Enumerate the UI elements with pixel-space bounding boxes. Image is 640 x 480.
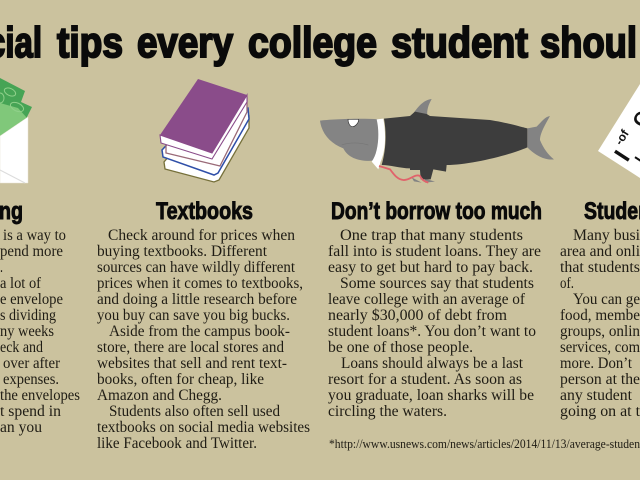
text block: budgeting body: . bbox=[0, 259, 3, 276]
text block: textbooks body: you buy can save you big bucks. bbox=[97, 307, 290, 324]
icon: discount card bbox=[598, 84, 640, 178]
title: student bbox=[391, 19, 528, 67]
text block: textbooks body: Students also often sell used bbox=[109, 403, 280, 420]
text block: discounts body: that students bbox=[560, 259, 640, 276]
text block: budgeting body: e envelope bbox=[0, 291, 63, 308]
text block: textbooks body: Amazon and Chegg. bbox=[97, 387, 222, 404]
text block: borrowing body: One trap that many students bbox=[340, 227, 523, 244]
title: every bbox=[137, 19, 233, 67]
text block: textbooks body: Check around for prices when bbox=[108, 227, 295, 244]
text block: textbooks body: like Facebook and Twitter. bbox=[97, 435, 257, 452]
text block: borrowing body: be one of those people. bbox=[328, 339, 473, 356]
text block: textbooks body: textbooks on social media websites bbox=[97, 419, 310, 436]
title: college bbox=[248, 19, 377, 67]
icon: shark in a suit bbox=[320, 99, 554, 183]
text block: textbooks body: buying textbooks. Different bbox=[97, 243, 268, 260]
text block: discounts body: You can ge bbox=[573, 291, 640, 308]
text block: discounts body bbox=[560, 227, 640, 420]
text block: discounts body: going on at t bbox=[560, 403, 640, 420]
icon: envelope with money bbox=[0, 78, 32, 183]
text block: borrowing body: Loans should always be a last bbox=[341, 355, 524, 372]
text block: borrowing body: Some sources say that students bbox=[340, 275, 534, 292]
text block: borrowing body: leave college with an average of bbox=[328, 291, 526, 308]
text block: budgeting body: the envelopes bbox=[0, 387, 80, 404]
panel: budgeting bbox=[0, 198, 80, 436]
text block: discounts body: any student bbox=[560, 387, 633, 404]
text block: textbooks body bbox=[97, 227, 310, 452]
text block: textbooks body: books, often for cheap, like bbox=[97, 371, 264, 388]
text block: discounts body: area and onli bbox=[560, 243, 640, 260]
title: tips bbox=[57, 19, 123, 67]
text block: discounts body: more. Don’t bbox=[560, 355, 633, 372]
text block: budgeting body: an you bbox=[0, 419, 42, 436]
text block: borrowing body: resort for a student. As soon as bbox=[328, 371, 522, 388]
panel: student discounts bbox=[560, 198, 640, 420]
text block: budgeting body: over after bbox=[3, 355, 61, 372]
text block: borrowing body: you graduate, loan sharks will be bbox=[328, 387, 534, 404]
text block: borrowing body: circling the waters. bbox=[328, 403, 447, 420]
heading: textbooks: Textbooks bbox=[156, 198, 253, 225]
icon: stack of books bbox=[160, 79, 249, 182]
text block: budgeting body: expenses. bbox=[3, 371, 59, 388]
text block: textbooks body: store, there are local stores and bbox=[97, 339, 284, 356]
heading: don't borrow too much: Don’t borrow too much bbox=[331, 198, 542, 225]
text block: budgeting body: eck and bbox=[0, 339, 43, 356]
text block: budgeting body bbox=[0, 227, 80, 436]
text block: budgeting body: a lot of bbox=[0, 275, 42, 292]
text block: textbooks body: sources can have wildly different bbox=[97, 259, 296, 276]
text block: budgeting body: pend more bbox=[0, 243, 63, 260]
text block: budgeting body: t spend in bbox=[0, 403, 61, 420]
panel: don't borrow too much bbox=[328, 198, 640, 451]
text block: borrowing body: nearly $30,000 of debt from bbox=[328, 307, 507, 324]
text block: discounts body: Many busi bbox=[573, 227, 640, 244]
title bbox=[0, 19, 637, 67]
panel: textbooks bbox=[97, 198, 310, 452]
text block: textbooks body: websites that sell and rent text- bbox=[97, 355, 287, 372]
text block: borrowing body: student loans*. You don’t want to bbox=[328, 323, 536, 340]
text block: discounts body: groups, onlin bbox=[560, 323, 640, 340]
text block: budgeting body: is a way to bbox=[3, 227, 66, 244]
text block: discounts body: person at the bbox=[560, 371, 640, 388]
text block: budgeting body: s dividing bbox=[0, 307, 56, 324]
text block: discounts body: of. bbox=[560, 275, 574, 292]
text block: budgeting body: ny weeks bbox=[0, 323, 54, 340]
text block: textbooks body: prices when it comes to textbooks, bbox=[97, 275, 303, 292]
text block: borrowing body bbox=[328, 227, 541, 420]
text block: borrowing body: fall into is student loans. They are bbox=[328, 243, 541, 260]
text block: discounts body: food, membe bbox=[560, 307, 640, 324]
text block: textbooks body: Aside from the campus book- bbox=[109, 323, 290, 340]
text block: borrowing body: easy to get but hard to pay back. bbox=[328, 259, 533, 276]
text block: textbooks body: and doing a little research before bbox=[97, 291, 297, 308]
icon: discount card: -of bbox=[612, 126, 632, 148]
icon: discount card: I bbox=[609, 146, 636, 166]
